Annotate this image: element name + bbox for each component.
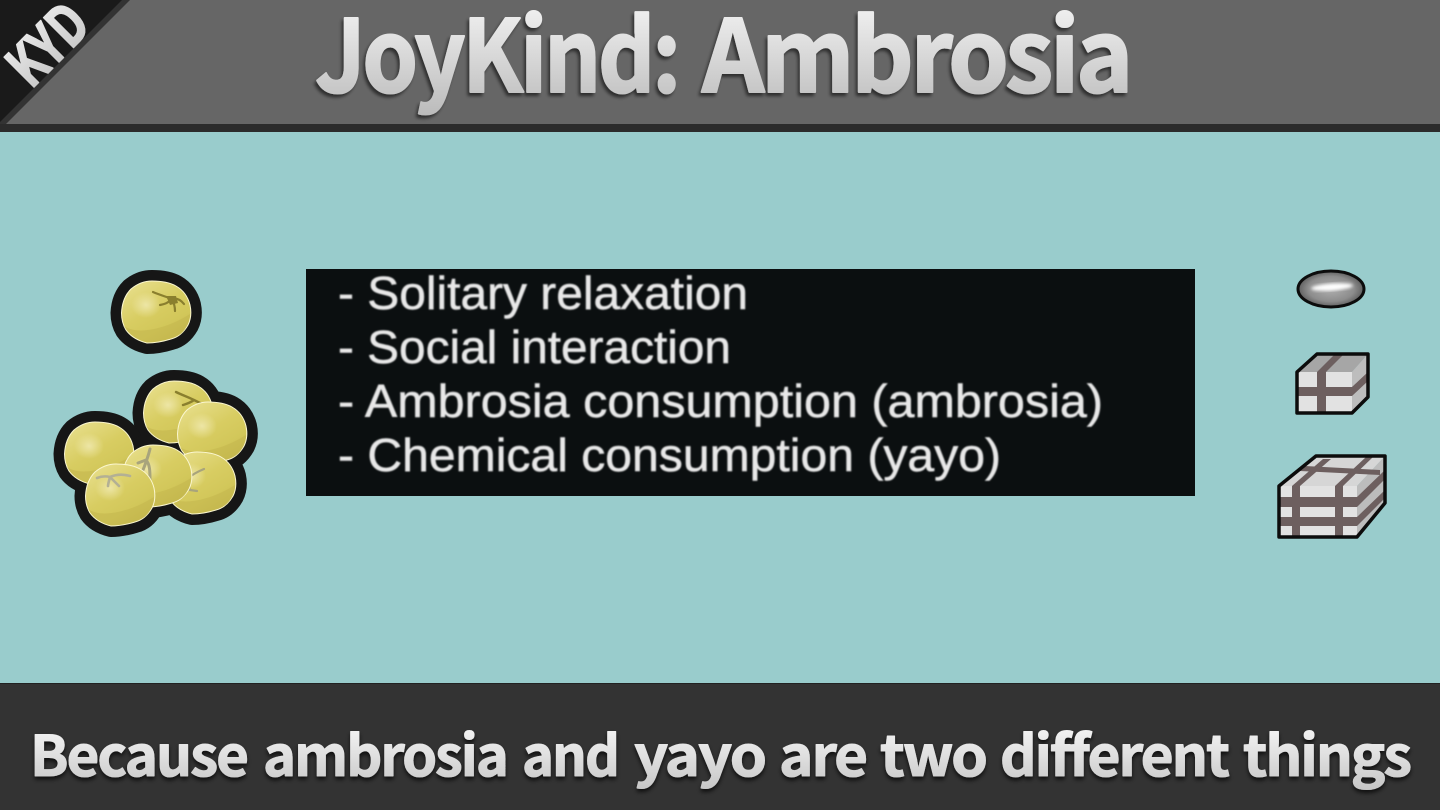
footer caption: and xyxy=(522,712,618,793)
icon: pile of ambrosia fruit xyxy=(64,381,247,526)
footer caption: things xyxy=(1243,712,1410,793)
title xyxy=(315,0,1130,121)
footer caption: ambrosia xyxy=(263,712,507,793)
icon: small crate xyxy=(1297,354,1368,413)
header bar xyxy=(0,0,1440,132)
list item: solitary relaxation: - Solitary relaxation xyxy=(338,267,748,319)
footer caption: two xyxy=(880,712,986,793)
footer caption: Because xyxy=(30,712,247,793)
panel: joy activities list xyxy=(306,267,1195,496)
pile outline xyxy=(64,381,247,526)
footer caption: yayo xyxy=(634,712,765,793)
icon: large crate xyxy=(1279,456,1385,537)
footer bar xyxy=(0,683,1440,810)
footer caption: different xyxy=(1000,712,1229,793)
icon: single ambrosia fruit xyxy=(122,281,191,343)
background panel xyxy=(0,132,1440,683)
list item: chemical consumption: - Chemical consumption (yayo) xyxy=(338,429,1001,481)
list item: social interaction: - Social interaction xyxy=(338,321,731,373)
icon: pill xyxy=(1298,271,1364,307)
footer caption xyxy=(30,712,1410,793)
list item: ambrosia consumption: - Ambrosia consumption (ambrosia) xyxy=(338,375,1103,427)
footer caption: are xyxy=(779,712,866,793)
